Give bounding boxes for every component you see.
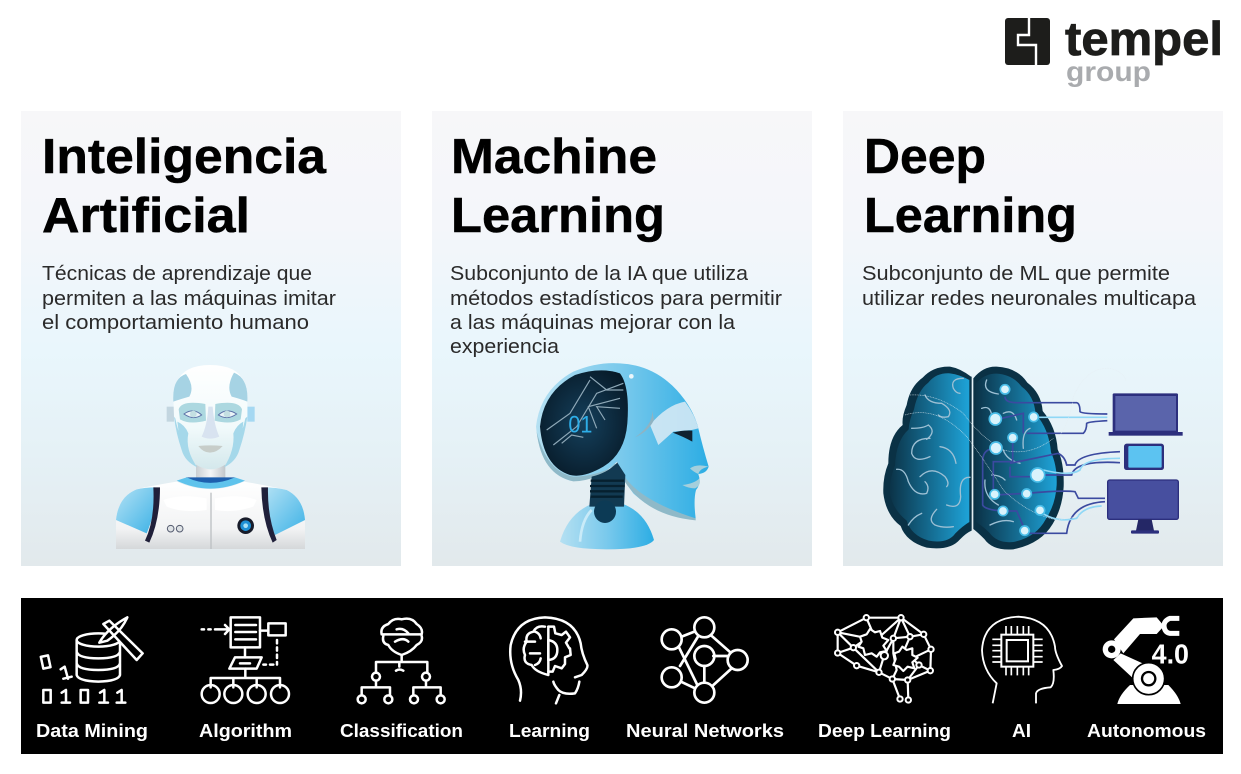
icon: learning head [510,617,587,703]
description: permiten a las máquinas imitar [42,287,336,310]
icon: robot arm 4.0: 4.0 [1152,638,1189,669]
label: Data Mining [36,721,148,741]
right brain hemisphere [905,367,1126,550]
description: Subconjunto de ML que permite [862,262,1170,285]
heading: Deep [864,130,986,184]
heading: Learning [864,189,1077,243]
description: Técnicas de aprendizaje que [42,262,312,285]
heading [42,130,327,243]
laptop [1109,393,1183,436]
description [450,262,782,358]
tablet [1124,444,1164,470]
label: Deep Learning [818,721,951,741]
heading: Inteligencia [42,130,327,184]
heading: Learning [451,189,665,243]
description: Subconjunto de la IA que utiliza [450,262,749,285]
label: AI [1012,721,1031,741]
panel: Machine Learning [432,111,812,566]
illustration: brain connected to devices [883,367,1183,550]
description [42,262,336,334]
panel: Deep Learning [843,111,1223,566]
heading [864,130,1077,243]
icon: algorithm [202,617,289,703]
icon: robot arm 4.0 [1103,617,1189,704]
description: a las máquinas mejorar con la [450,311,736,334]
label: Classification [340,721,463,741]
icon: deep learning brain network [835,615,934,703]
desktop monitor [1108,480,1178,534]
panel: Inteligencia Artificial [21,111,401,566]
description: utilizar redes neuronales multicapa [862,287,1197,310]
black band: concept icons [21,598,1223,754]
illustration: robot head profile: 01 [568,412,592,439]
heading [451,130,665,243]
illustration: robot head profile [536,363,709,549]
label: Neural Networks [626,721,784,741]
description: el comportamiento humano [42,311,309,334]
icon: AI head with chip [982,617,1062,703]
description: experiencia [450,335,560,358]
illustration: humanoid robot [116,365,305,549]
description: métodos estadísticos para permitir [450,287,782,310]
logo wordmark: tempel [1065,12,1223,65]
logo mark [1005,18,1050,65]
icon: classification [358,619,445,703]
heading: Machine [451,130,657,184]
label: Learning [509,721,590,741]
logo subtitle: group [1066,56,1151,87]
logo: tempel group [1005,12,1223,87]
label: Algorithm [199,721,292,741]
left brain hemisphere [883,367,972,548]
icon: neural network [662,617,748,703]
icon: data mining [41,617,143,703]
label: Autonomous [1087,721,1206,741]
description [862,262,1197,310]
heading: Artificial [42,189,250,243]
